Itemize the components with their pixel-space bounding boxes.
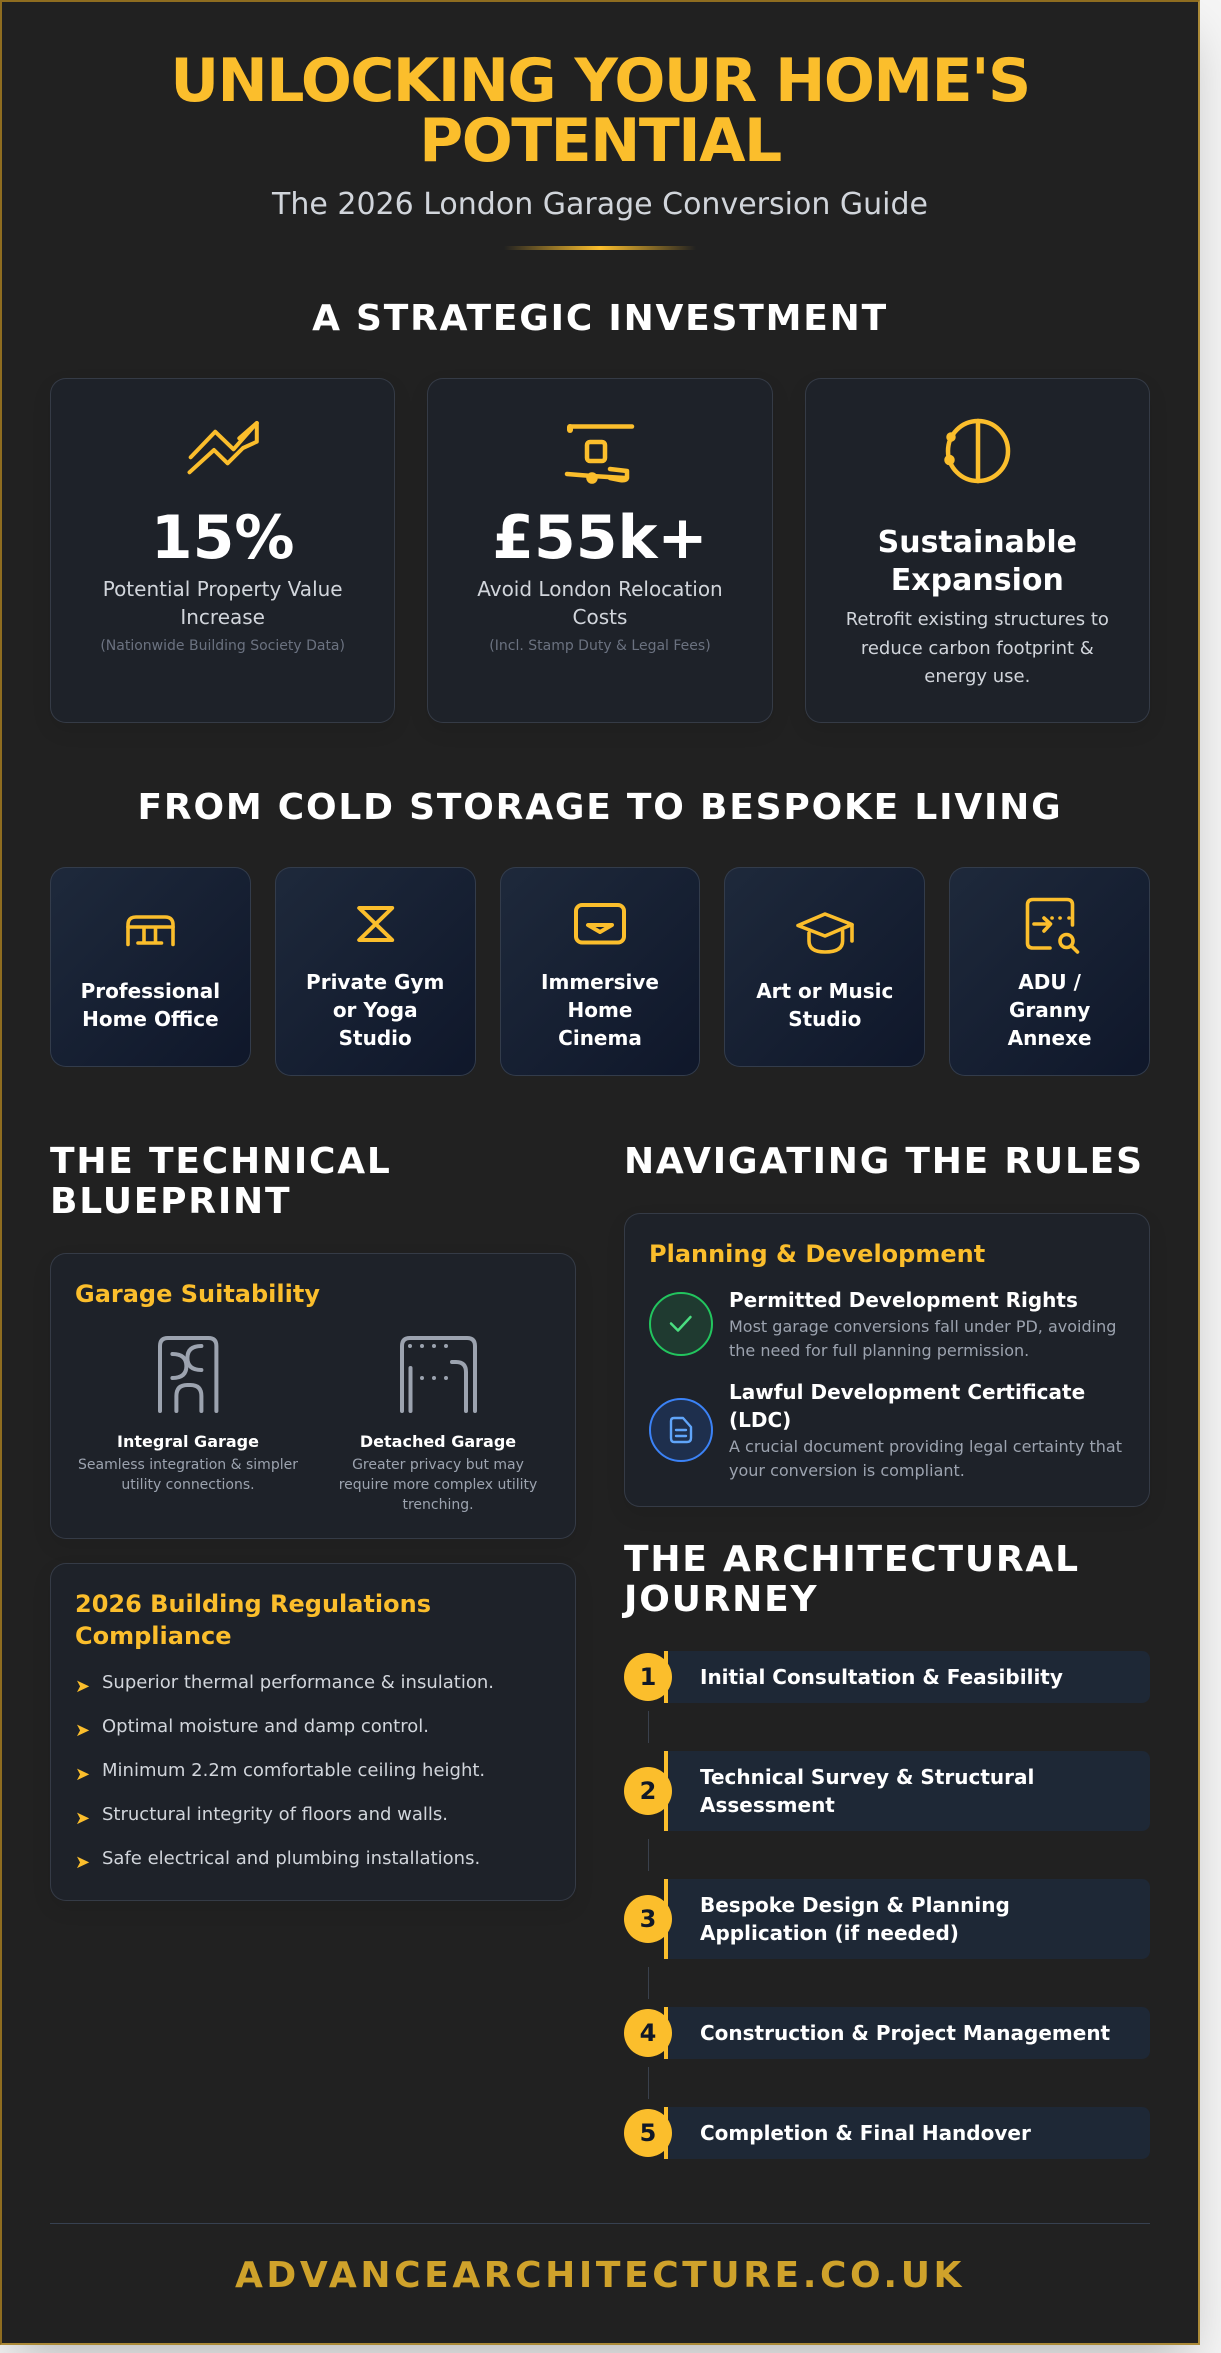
label: ADU / bbox=[1018, 970, 1081, 994]
rule description: A crucial document providing legal certainty that bbox=[729, 1436, 1122, 1456]
card text bbox=[846, 609, 1109, 687]
title: UNLOCKING YOUR HOME'S bbox=[170, 46, 1030, 116]
garage name: Integral Garage bbox=[117, 1432, 259, 1450]
step bar bbox=[664, 1651, 1150, 1703]
icon: screen bbox=[574, 903, 626, 944]
step bar bbox=[664, 2007, 1150, 2059]
label bbox=[306, 970, 444, 1050]
list item: Safe electrical and plumbing installations. bbox=[102, 1848, 480, 1869]
heading: the architectural journey bbox=[622, 1538, 1080, 1620]
icon: green check bbox=[649, 1292, 713, 1356]
panel: planning and development bbox=[624, 1213, 1150, 1507]
label bbox=[1008, 970, 1092, 1050]
step text: Application (if needed) bbox=[700, 1921, 959, 1945]
step text: Initial Consultation & Feasibility bbox=[700, 1665, 1063, 1689]
label bbox=[81, 979, 220, 1031]
garage description: require more complex utility bbox=[339, 1477, 537, 1493]
rule description: the need for full planning permission. bbox=[729, 1340, 1029, 1360]
title: POTENTIAL bbox=[419, 106, 781, 176]
subtitle: The 2026 London Garage Conversion Guide bbox=[272, 187, 928, 222]
step 5 bbox=[624, 2107, 1150, 2159]
step number: 4 bbox=[640, 2019, 656, 2047]
step number bbox=[624, 2009, 672, 2057]
step 3 bbox=[624, 1879, 1150, 1959]
label: Studio bbox=[339, 1026, 412, 1050]
stat number: £55k+ bbox=[492, 503, 708, 573]
card text: reduce carbon footprint & bbox=[861, 638, 1094, 659]
step number: 1 bbox=[640, 1663, 656, 1691]
step text: Completion & Final Handover bbox=[700, 2121, 1031, 2145]
step number bbox=[624, 2109, 672, 2157]
heading: the technical blueprint bbox=[50, 1140, 392, 1222]
step number: 3 bbox=[640, 1905, 656, 1933]
icon: detached garage bbox=[400, 1336, 477, 1413]
stat label bbox=[103, 577, 343, 629]
rule description: Most garage conversions fall under PD, avoiding bbox=[729, 1316, 1116, 1336]
garage description bbox=[339, 1457, 537, 1513]
panel heading: Planning & Development bbox=[649, 1240, 985, 1268]
rule name: (LDC) bbox=[729, 1408, 791, 1432]
rule name: Lawful Development Certificate bbox=[729, 1380, 1085, 1404]
heading: from cold storage: FROM COLD STORAGE TO BESPOKE LIVING bbox=[138, 786, 1062, 828]
panel heading: 2026 Building Regulations bbox=[75, 1590, 431, 1618]
card heading: Expansion bbox=[891, 562, 1064, 598]
label: Art or Music bbox=[756, 979, 893, 1003]
heading: a strategic investment: A STRATEGIC INVESTMENT bbox=[312, 298, 888, 338]
panel: sustainable expansion bbox=[805, 378, 1150, 723]
card heading bbox=[878, 524, 1077, 598]
rule description bbox=[729, 1316, 1116, 1360]
step text: Assessment bbox=[700, 1793, 835, 1817]
rule name bbox=[729, 1380, 1085, 1432]
icon: graduation cap bbox=[796, 912, 854, 954]
label: Professional bbox=[81, 979, 220, 1003]
label: Immersive bbox=[541, 970, 659, 994]
label: Private Gym bbox=[306, 970, 444, 994]
stat label: Avoid London Relocation bbox=[477, 577, 723, 601]
list item: Superior thermal performance & insulation. bbox=[102, 1672, 494, 1693]
heading: the architectural journey: JOURNEY bbox=[624, 1578, 818, 1620]
list item: Structural integrity of floors and walls. bbox=[102, 1804, 448, 1825]
label: Home bbox=[568, 998, 632, 1022]
card text: Retrofit existing structures to bbox=[846, 609, 1109, 630]
icon: blue document bbox=[649, 1398, 713, 1462]
icon: relocation costs bbox=[564, 424, 634, 484]
card text: energy use. bbox=[924, 666, 1030, 687]
icon: door plan with magnifier bbox=[1026, 898, 1080, 954]
panel: building regulations bbox=[50, 1563, 576, 1901]
arrow bullet: ➤ bbox=[75, 1852, 90, 1872]
garage description: trenching. bbox=[402, 1497, 474, 1513]
garage description: Greater privacy but may bbox=[352, 1457, 524, 1473]
footer website: ADVANCEARCHITECTURE.CO.UK bbox=[235, 2255, 965, 2296]
stat label bbox=[477, 577, 723, 629]
step number bbox=[624, 1767, 672, 1815]
stat label: Costs bbox=[573, 605, 627, 629]
garage name: Detached Garage bbox=[360, 1432, 516, 1450]
step bar bbox=[664, 2107, 1150, 2159]
step 2 bbox=[624, 1751, 1150, 1831]
arrow bullet: ➤ bbox=[75, 1808, 90, 1828]
label: Studio bbox=[788, 1007, 861, 1031]
step bar bbox=[664, 1751, 1150, 1831]
panel: studio bbox=[724, 867, 925, 1067]
bullet list bbox=[75, 1672, 494, 1872]
label: Granny bbox=[1009, 998, 1090, 1022]
panel: 15% value stat bbox=[50, 378, 395, 723]
arrow bullet: ➤ bbox=[75, 1720, 90, 1740]
label bbox=[756, 979, 893, 1031]
garage description: utility connections. bbox=[121, 1477, 255, 1493]
panel: 55k relocation stat bbox=[427, 378, 773, 723]
label bbox=[541, 970, 659, 1050]
stat label: Potential Property Value bbox=[103, 577, 343, 601]
panel: gym bbox=[275, 867, 476, 1076]
step 1 bbox=[624, 1651, 1150, 1703]
heading: the technical blueprint: BLUEPRINT bbox=[50, 1180, 291, 1222]
step text: Bespoke Design & Planning bbox=[700, 1893, 1010, 1917]
rule description: your conversion is compliant. bbox=[729, 1460, 965, 1480]
arrow bullet: ➤ bbox=[75, 1676, 90, 1696]
step number bbox=[624, 1653, 672, 1701]
label: Cinema bbox=[558, 1026, 642, 1050]
label: Annexe bbox=[1008, 1026, 1092, 1050]
step number: 5 bbox=[640, 2119, 656, 2147]
icon: desk bbox=[126, 915, 175, 946]
arrow bullet: ➤ bbox=[75, 1764, 90, 1784]
icon: rising chart bbox=[187, 420, 259, 474]
icon: divided circle bbox=[944, 418, 1010, 484]
step bar bbox=[664, 1879, 1150, 1959]
panel: cinema bbox=[500, 867, 700, 1076]
card heading: Sustainable bbox=[878, 524, 1077, 560]
panel: annexe bbox=[949, 867, 1150, 1076]
label: Home Office bbox=[82, 1007, 219, 1031]
icon: integral garage bbox=[158, 1336, 218, 1413]
step text: Construction & Project Management bbox=[700, 2021, 1110, 2045]
list item: Minimum 2.2m comfortable ceiling height. bbox=[102, 1760, 485, 1781]
list item: Optimal moisture and damp control. bbox=[102, 1716, 429, 1737]
header divider bbox=[504, 246, 696, 250]
rule name: Permitted Development Rights bbox=[729, 1288, 1078, 1312]
title bbox=[170, 46, 1030, 176]
stat number: 15% bbox=[151, 503, 294, 573]
panel heading: Compliance bbox=[75, 1622, 232, 1650]
step text bbox=[700, 1893, 1010, 1945]
step number: 2 bbox=[640, 1777, 656, 1805]
heading: the architectural journey: THE ARCHITECTURAL bbox=[624, 1538, 1080, 1580]
stat source: (Incl. Stamp Duty & Legal Fees) bbox=[489, 638, 711, 654]
step text: Technical Survey & Structural bbox=[700, 1765, 1034, 1789]
stat label: Increase bbox=[180, 605, 265, 629]
panel heading: Garage Suitability bbox=[75, 1280, 320, 1308]
label: or Yoga bbox=[333, 998, 418, 1022]
panel: garage suitability bbox=[50, 1253, 576, 1538]
panel heading bbox=[75, 1590, 431, 1650]
panel: home office bbox=[50, 867, 251, 1067]
garage description: Seamless integration & simpler bbox=[78, 1457, 298, 1473]
step text bbox=[700, 1765, 1034, 1817]
icon: hourglass bbox=[357, 906, 394, 942]
heading: navigating the rules: NAVIGATING THE RULES bbox=[624, 1140, 1144, 1182]
heading: the technical blueprint: THE TECHNICAL bbox=[50, 1140, 392, 1182]
garage description bbox=[78, 1457, 298, 1493]
step 4 bbox=[624, 2007, 1150, 2059]
stat source: (Nationwide Building Society Data) bbox=[100, 638, 345, 654]
step number bbox=[624, 1895, 672, 1943]
column: integral garage bbox=[78, 1336, 298, 1493]
column: detached garage bbox=[339, 1336, 537, 1513]
rule description bbox=[729, 1436, 1122, 1480]
